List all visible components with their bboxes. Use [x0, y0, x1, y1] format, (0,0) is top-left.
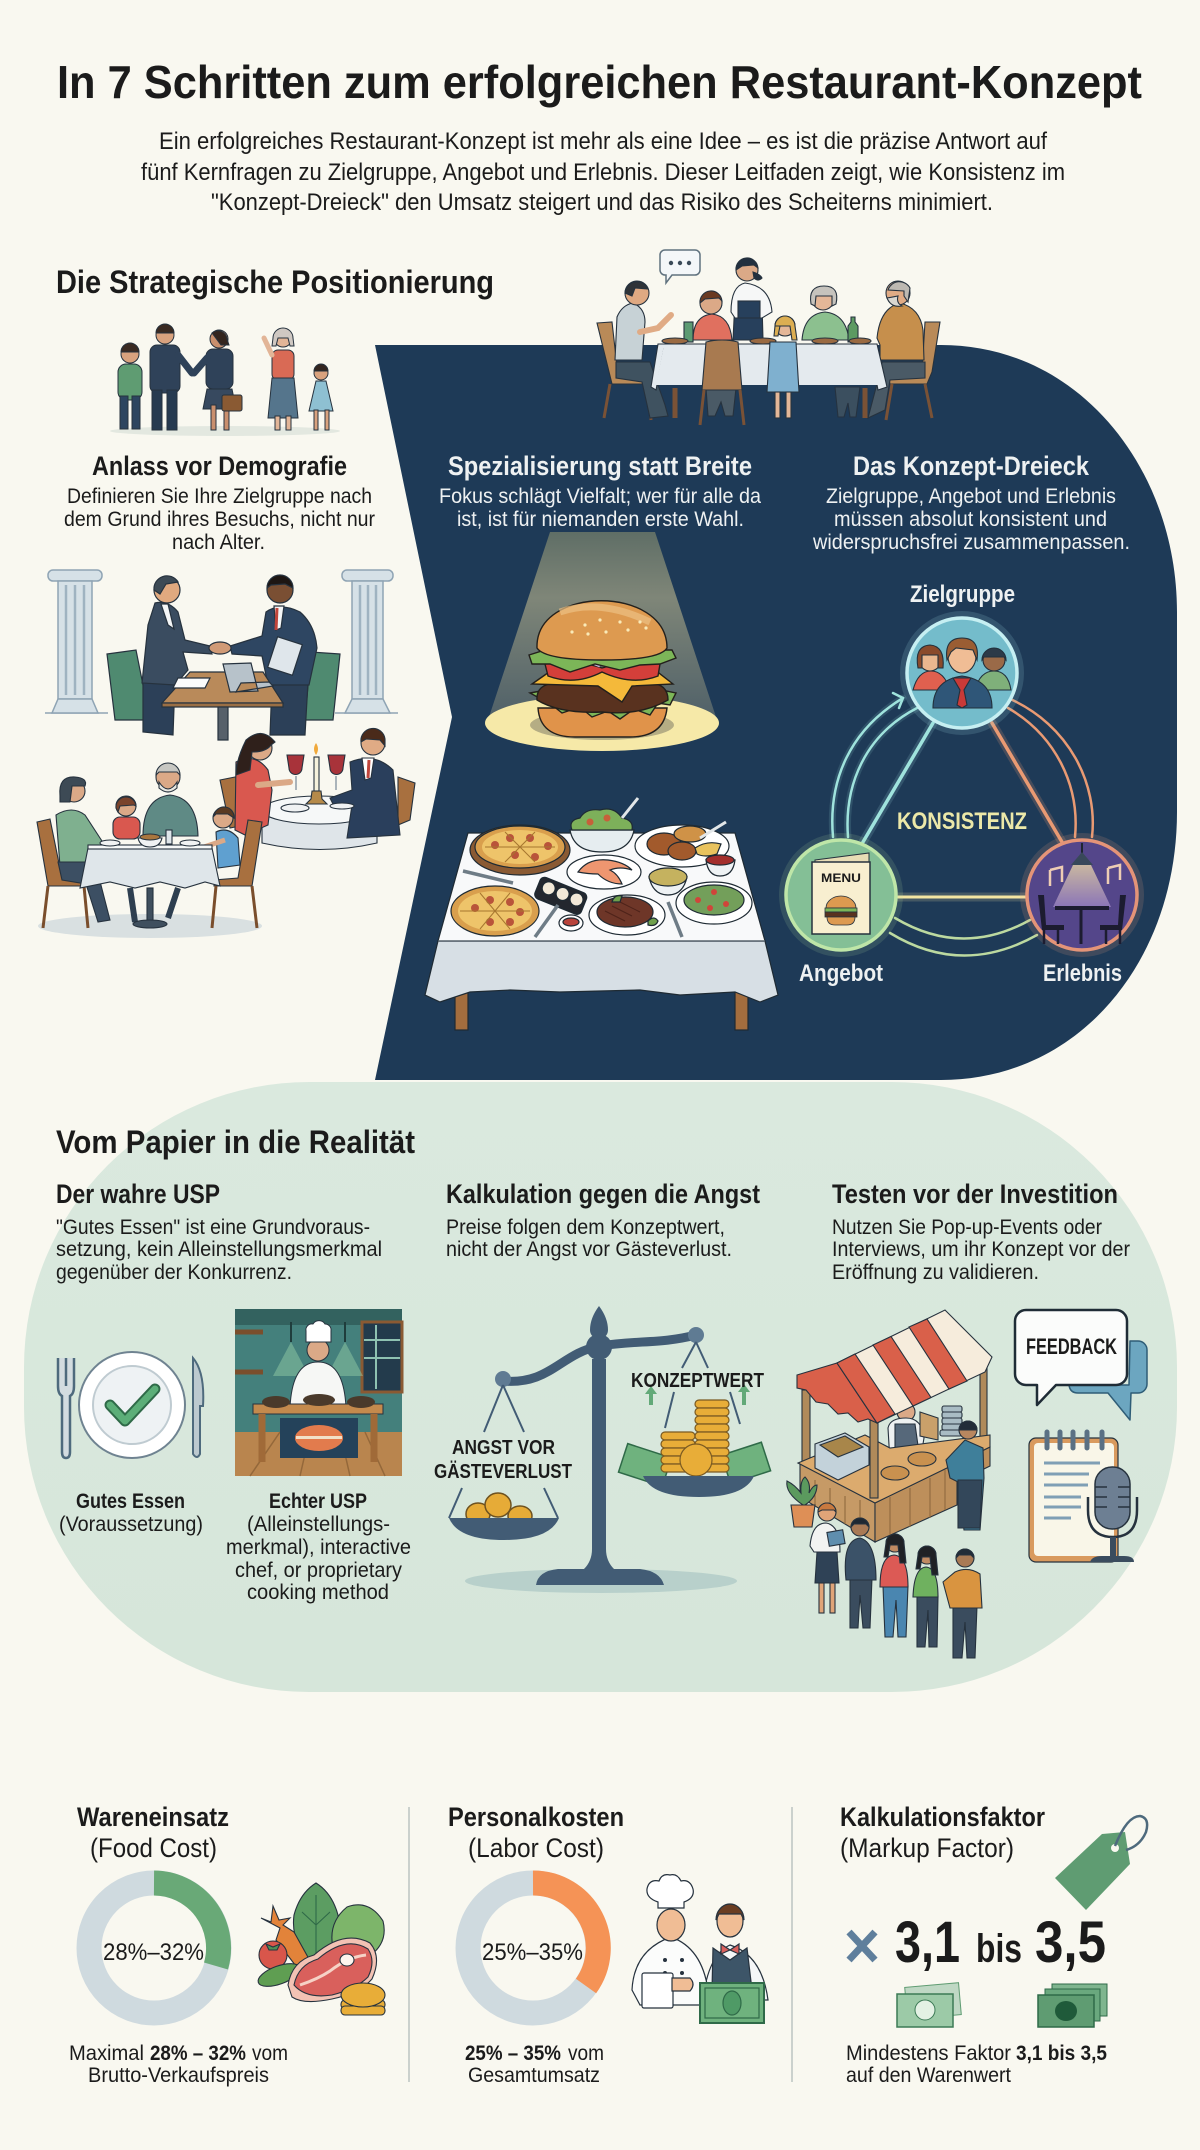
caption: Wareneinsatz: Brutto-Verkaufspreis [88, 2064, 269, 2087]
caption: Wareneinsatz: 28% – 32% [150, 2042, 246, 2065]
caption: Wareneinsatz: Maximal [69, 2042, 144, 2065]
illustration: balance scale: GÄSTEVERLUST [434, 1460, 572, 1483]
illustration: balance scale [434, 1306, 771, 1593]
heading: Vom Papier in die Realität: Vom Papier in die Realität [56, 1124, 415, 1160]
caption: Personalkosten: 25% – 35% [465, 2042, 561, 2065]
salmon plate [567, 855, 641, 889]
caption: Wareneinsatz: vom [252, 2042, 288, 2065]
caption: Wareneinsatz [69, 2042, 288, 2087]
illustration: pop-up food stall with queue [787, 1310, 992, 1658]
label: Gutes Essen [59, 1490, 203, 1536]
stat: Wareneinsatz: Wareneinsatz [77, 1802, 229, 1832]
caption: Personalkosten [465, 2042, 604, 2087]
factor values: 3,1 [895, 1910, 960, 1975]
donut chart: 28%–32%: 28%–32% [103, 1939, 204, 1966]
text block: Der wahre USP [56, 1179, 382, 1284]
steak plate [589, 895, 665, 935]
icon: clipboard and microphone [1029, 1432, 1137, 1562]
text block: Spezialisierung statt Breite: Spezialisierung statt Breite [448, 451, 752, 481]
labels: triangle [799, 581, 1122, 987]
panel: green reality panel [24, 1082, 1177, 1692]
donut chart: 28%–32% [89, 1883, 219, 2013]
stat: Wareneinsatz [69, 1802, 385, 2087]
label: Echter USP: chef, or proprietary [235, 1559, 402, 1582]
small bowls [649, 868, 687, 895]
heading: Die Strategische Positionierung: Die Strategische Positionierung [56, 264, 494, 300]
illustration: balance scale: ANGST VOR [452, 1437, 555, 1459]
text block: Kalkulation gegen die Angst [446, 1179, 760, 1261]
donut chart: 25%–35% [468, 1883, 598, 2013]
triangle diagram: Konzept-Dreieck [779, 581, 1144, 987]
chicken plate [635, 822, 729, 867]
intro text [141, 128, 1065, 216]
text block: Anlass vor Demografie: Definieren Sie Ihre Zielgruppe nach [67, 485, 372, 508]
text block: Der wahre USP: "Gutes Essen" ist eine Grundvoraus- [56, 1216, 370, 1239]
illustration: diverse table party [597, 250, 940, 425]
icon: feedback speech bubbles: FEEDBACK [1026, 1334, 1117, 1359]
icon: plate with check and cutlery [58, 1352, 203, 1458]
text block: Kalkulation gegen die Angst: Kalkulation gegen die Angst [446, 1179, 760, 1209]
labels: triangle: KONSISTENZ [897, 808, 1027, 835]
illustration: business handshake [45, 570, 398, 740]
intro text: Ein erfolgreiches Restaurant-Konzept ist mehr als eine Idee – es ist die präzise Antwort auf [159, 128, 1047, 155]
factor values [895, 1910, 1106, 1975]
illustration: group of people standing [110, 324, 340, 436]
node: Angebot: MENU [821, 871, 861, 885]
text block: Das Konzept-Dreieck [812, 451, 1130, 554]
text block: Testen vor der Investition: Nutzen Sie Pop-up-Events oder [832, 1216, 1102, 1239]
factor values: bis [976, 1927, 1022, 1971]
illustration: family at table [37, 763, 262, 938]
stat: Personalkosten [448, 1802, 768, 2087]
illustration: balance scale: KONZEPTWERT [631, 1370, 764, 1392]
text block: Das Konzept-Dreieck: widerspruchsfrei zusammenpassen. [812, 531, 1130, 554]
label: Gutes Essen: Gutes Essen [76, 1490, 185, 1513]
icon: big money stack [1038, 1984, 1107, 2027]
money and coins [618, 1384, 771, 1486]
sushi [533, 876, 588, 916]
text block: Das Konzept-Dreieck: Zielgruppe, Angebot und Erlebnis [826, 485, 1116, 508]
salad bowl [570, 798, 638, 852]
icon: multiply sign [849, 1932, 875, 1960]
text block: Testen vor der Investition: Interviews, um ihr Konzept vor der [832, 1238, 1130, 1261]
salad plate [676, 882, 752, 924]
label: Echter USP [226, 1490, 411, 1604]
caption: Kalkulationsfaktor [846, 2042, 1107, 2087]
text block: Testen vor der Investition [832, 1179, 1130, 1284]
label: Echter USP: (Alleinstellungs- [247, 1513, 390, 1536]
speech bubble [660, 250, 700, 283]
node: Zielgruppe [900, 611, 1024, 735]
label: Echter USP: cooking method [247, 1581, 389, 1604]
text block: Spezialisierung statt Breite: ist, ist für niemanden erste Wahl. [457, 508, 744, 531]
intro text: "Konzept-Dreieck" den Umsatz steigert und das Risiko des Scheiterns minimiert. [211, 189, 993, 216]
factor values: 3,5 [1035, 1910, 1106, 1975]
awning [797, 1310, 992, 1423]
text block: Kalkulation gegen die Angst: nicht der Angst vor Gästeverlust. [446, 1238, 732, 1261]
illustration: couple at candle-lit table [220, 728, 415, 850]
text block: Kalkulation gegen die Angst: Preise folgen dem Konzeptwert, [446, 1216, 725, 1239]
stat: Personalkosten: Personalkosten [448, 1802, 624, 1832]
caption: Personalkosten: Gesamtumsatz [468, 2064, 600, 2087]
caption: Kalkulationsfaktor: 3,1 bis 3,5 [1016, 2042, 1107, 2065]
text block: Testen vor der Investition: Testen vor der Investition [832, 1179, 1118, 1209]
label: Echter USP: merkmal), interactive [226, 1536, 411, 1559]
text block: Spezialisierung statt Breite [439, 451, 761, 531]
caption: Kalkulationsfaktor: auf den Warenwert [846, 2064, 1011, 2087]
caption: Kalkulationsfaktor: Mindestens Faktor [846, 2042, 1011, 2065]
stat: Kalkulationsfaktor: Kalkulationsfaktor [840, 1802, 1045, 1832]
title: In 7 Schritten zum erfolgreichen Restaurant-Konzept [57, 56, 1142, 108]
text block: Anlass vor Demografie: dem Grund ihres Besuchs, nicht nur [64, 508, 375, 531]
stat: Kalkulationsfaktor: (Markup Factor) [840, 1833, 1014, 1863]
text block: Testen vor der Investition: Eröffnung zu validieren. [832, 1261, 1039, 1284]
text block: Anlass vor Demografie: Anlass vor Demografie [92, 451, 347, 481]
text block: Der wahre USP: gegenüber der Konkurrenz. [56, 1261, 292, 1284]
icon: price tag [1055, 1816, 1147, 1910]
stat: Kalkulationsfaktor [840, 1802, 1147, 2087]
illustration: chef USP picture [235, 1309, 402, 1476]
stat: Wareneinsatz: (Food Cost) [90, 1833, 217, 1863]
labels: triangle: Zielgruppe [910, 581, 1015, 608]
icon: small money stack [897, 1983, 961, 2027]
node: Erlebnis [1020, 833, 1144, 957]
panel: dark arrow panel [375, 345, 1177, 1080]
text block: Das Konzept-Dreieck: müssen absolut konsistent und [834, 508, 1107, 531]
text block: Anlass vor Demografie: nach Alter. [172, 531, 265, 554]
node: Angebot [779, 833, 903, 957]
intro text: fünf Kernfragen zu Zielgruppe, Angebot und Erlebnis. Dieser Leitfaden zeigt, wie Konsistenz im [141, 159, 1065, 186]
pizzas [470, 825, 570, 875]
donut chart: 25%–35%: 25%–35% [482, 1939, 583, 1966]
text block: Der wahre USP: Der wahre USP [56, 1179, 220, 1209]
icon: feedback speech bubbles [1015, 1310, 1147, 1420]
icon: chef and waiter with money [632, 1875, 768, 2023]
text block: Anlass vor Demografie [64, 451, 375, 554]
cutlery [463, 871, 682, 937]
stat: Personalkosten: (Labor Cost) [468, 1833, 604, 1863]
text block: Das Konzept-Dreieck: Das Konzept-Dreieck [853, 451, 1090, 481]
labels: triangle: Erlebnis [1043, 960, 1122, 987]
queue of people [810, 1503, 982, 1658]
illustration: crowded table of dishes [425, 798, 778, 1030]
label: Echter USP: Echter USP [269, 1490, 367, 1513]
illustration: burger in spotlight [485, 532, 719, 751]
caption: Personalkosten: vom [568, 2042, 604, 2065]
labels: triangle: Angebot [799, 960, 883, 987]
text block: Spezialisierung statt Breite: Fokus schlägt Vielfalt; wer für alle da [439, 485, 761, 508]
text block: Der wahre USP: setzung, kein Alleinstellungsmerkmal [56, 1238, 382, 1261]
icon: groceries [255, 1883, 385, 2015]
label: Gutes Essen: (Voraussetzung) [59, 1513, 203, 1536]
